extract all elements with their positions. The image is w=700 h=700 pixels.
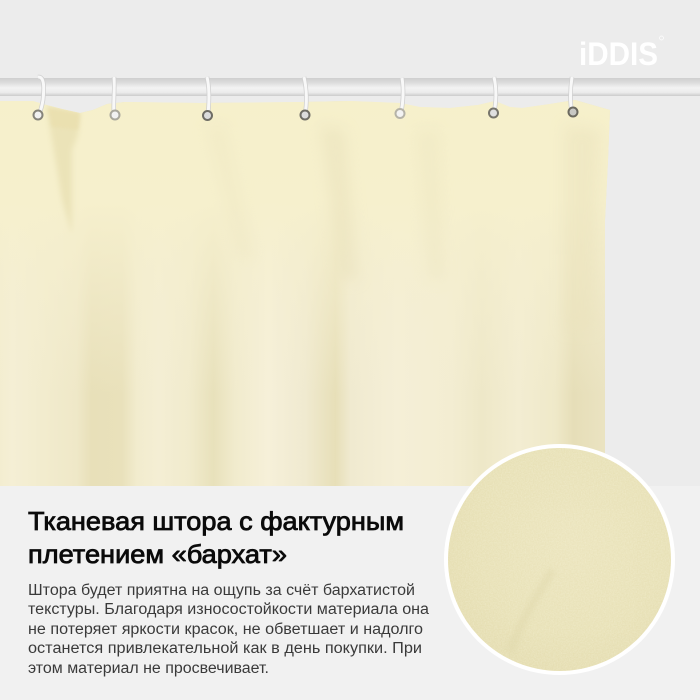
body text: текстуры. Благодаря износостойкости материала она	[28, 601, 429, 618]
curtain rod	[0, 78, 700, 96]
ring 3	[203, 77, 212, 120]
curtain rings and grommets	[34, 77, 578, 120]
fabric texture close-up circle	[444, 444, 675, 675]
body text: не потеряет яркости красок, не обветшает и надолго	[28, 621, 423, 638]
heading: плетением «бархат»	[28, 539, 287, 569]
body text	[28, 582, 429, 677]
heading: Тканевая штора с фактурным	[28, 506, 404, 536]
ring 7	[568, 77, 578, 116]
body text: останется привлекательной как в день покупки. При	[28, 640, 422, 657]
ring 2	[110, 77, 120, 120]
bottom text panel background	[0, 486, 700, 700]
body text: Штора будет приятна на ощупь за счёт бархатистой	[28, 582, 415, 599]
heading	[28, 506, 404, 569]
ring 4	[300, 77, 310, 120]
ring 5	[396, 78, 404, 118]
body text: этом материал не просвечивает.	[28, 660, 269, 677]
logo: IDDIS: iDDIS	[579, 36, 658, 72]
curtain fabric with folds	[0, 95, 615, 487]
ring 1	[34, 77, 44, 120]
ring 6	[489, 77, 498, 118]
background: upper wall	[0, 0, 700, 486]
